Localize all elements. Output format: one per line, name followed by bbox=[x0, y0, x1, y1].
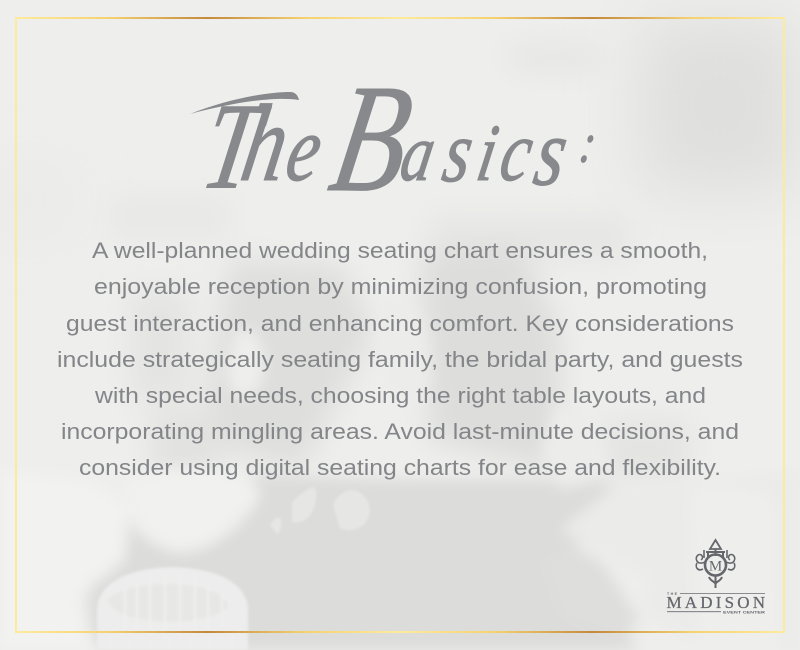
title: h bbox=[234, 84, 298, 204]
title: c bbox=[494, 104, 541, 199]
title: i bbox=[471, 108, 505, 198]
body text paragraph: incorporating mingling areas. Avoid last-minute decisions, and bbox=[61, 419, 739, 444]
body text paragraph: include strategically seating family, the bridal party, and guests bbox=[57, 347, 743, 372]
title: s bbox=[436, 104, 481, 201]
logo: The Madison Event Center: THE bbox=[667, 592, 678, 596]
title: B bbox=[320, 54, 424, 224]
title: e bbox=[279, 98, 348, 201]
body text paragraph: A well-planned wedding seating chart ensures a smooth, bbox=[92, 238, 708, 263]
body text paragraph: consider using digital seating charts for ease and flexibility. bbox=[79, 455, 721, 480]
title: : bbox=[576, 113, 601, 173]
leaves bbox=[270, 487, 370, 535]
body text paragraph: guest interaction, and enhancing comfort. Key considerations bbox=[66, 311, 734, 336]
body text paragraph: with special needs, choosing the right table layouts, and bbox=[94, 383, 706, 408]
icon: monogram crest: M bbox=[709, 558, 722, 574]
logo: The Madison Event Center: EVENT CENTER bbox=[723, 610, 765, 614]
logo: The Madison Event Center: MADISON bbox=[666, 593, 765, 612]
title: T bbox=[193, 79, 277, 215]
title: s bbox=[527, 98, 576, 205]
body text paragraph: enjoyable reception by minimizing confusion, promoting bbox=[94, 274, 707, 299]
title: a bbox=[395, 108, 442, 198]
candle glass bbox=[97, 567, 248, 650]
